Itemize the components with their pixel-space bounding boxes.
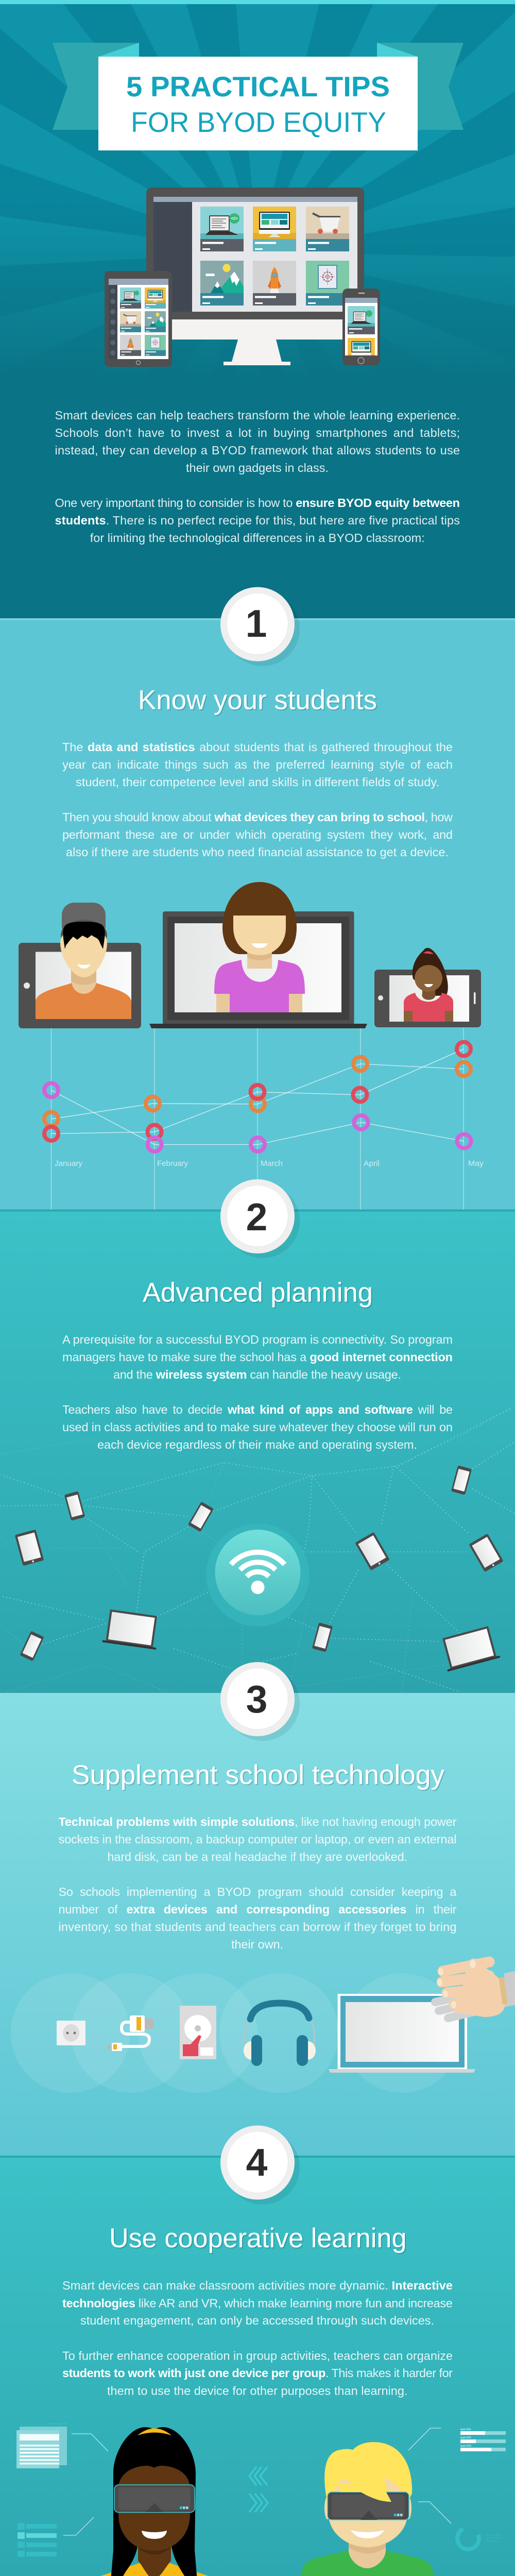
text: section 4: Smart devices can make classroom activities more dynamic. Interactive xyxy=(62,2279,453,2292)
icon: progress ring: Your progress xyxy=(486,2534,502,2537)
icon: notes panel: learning notes xyxy=(49,2422,67,2426)
text: section 4 xyxy=(62,2279,453,2398)
icon: hand xyxy=(435,1959,515,2018)
illustration: devices xyxy=(105,188,380,367)
icon: chevrons xyxy=(249,2467,268,2512)
icon: hard disk xyxy=(180,2006,216,2059)
text: section 3: inventory, so that students and teachers can borrow if they forget to bring xyxy=(59,1920,456,1934)
tablet xyxy=(105,271,172,367)
text: section 1: also if there are students who need financial assistance to get a device. xyxy=(66,845,449,859)
text: section 2: A prerequisite for a successful BYOD program is connectivity. So program xyxy=(62,1333,453,1346)
text: section 4: student engagement, can only be accessed through such devices. xyxy=(80,2314,434,2327)
intro text: for limiting the technological differences in a BYOD classroom: xyxy=(90,531,425,545)
text: section 2: each device regardless of their make and operating system. xyxy=(97,1438,417,1451)
top strip xyxy=(0,0,515,4)
number badge 2: 2 xyxy=(246,1195,267,1239)
heading: Supplement school technology: Supplement school technology xyxy=(72,1760,444,1790)
intro text: Schools don’t have to invest a lot in buying smartphones and tablets; xyxy=(55,426,460,439)
background circles xyxy=(10,1973,462,2093)
title line 2: FOR BYOD EQUITY xyxy=(131,106,386,138)
icon: list xyxy=(18,2523,57,2557)
icon: progress ring: assignment xyxy=(486,2540,499,2543)
text: section 1: student, their competence level and skills in different fields of study. xyxy=(76,775,439,789)
chart: student progress by month: March xyxy=(261,1160,283,1168)
panel: section 2 background xyxy=(0,1210,515,1693)
character: boy with VR headset xyxy=(301,2442,434,2576)
intro text: One very important thing to consider is how to ensure BYOD equity between xyxy=(55,496,460,510)
monitor xyxy=(146,188,364,365)
text: section 4: To further enhance cooperation in group activities, teachers can organize xyxy=(62,2349,453,2363)
devices around the wifi hub xyxy=(15,1465,504,1672)
network: dotted connections xyxy=(0,1408,515,1693)
monitor: </> xyxy=(231,216,238,221)
text: section 3: sockets in the classroom, a backup computer or laptop, or even an external xyxy=(59,1833,456,1846)
intro text: instead, they can develop a BYOD framework that allows students to use xyxy=(55,444,460,457)
icon: headphones xyxy=(244,2003,316,2066)
icon: task bars: task 001 xyxy=(460,2428,471,2431)
text: section 2: and the wireless system can handle the heavy usage. xyxy=(113,1368,401,1381)
icon: power socket xyxy=(57,2021,85,2045)
title line 1: 5 PRACTICAL TIPS xyxy=(126,71,390,103)
number badge 3 xyxy=(220,1662,300,1741)
heading: Use cooperative learning: Use cooperative learning xyxy=(109,2223,407,2253)
icon: usb cable xyxy=(107,2015,153,2051)
text: section 1: The data and statistics about students that is gathered throughout the xyxy=(62,740,453,754)
intro text: Smart devices can help teachers transform the whole learning experience. xyxy=(55,409,460,422)
text: section 2: used in class activities and to make sure whatever they choose will run on xyxy=(62,1420,453,1434)
intro text: their own gadgets in class. xyxy=(186,461,329,474)
phone xyxy=(342,289,380,366)
text: section 4: students to work with just one device per group. This makes it harder for xyxy=(62,2366,453,2380)
panel: section 3 background xyxy=(0,1693,515,2156)
illustration: VR students xyxy=(16,2422,506,2576)
background: sunburst rays xyxy=(0,4,515,618)
text: section 4: technologies like AR and VR, which make learning more fun and increase xyxy=(62,2297,453,2310)
number badge 3: 3 xyxy=(246,1677,267,1721)
number badge 1: 1 xyxy=(246,602,267,645)
heading: Know your students: Know your students xyxy=(138,685,377,715)
text: section 3: hard disk, can be a real headache if they are overlooked. xyxy=(107,1850,407,1863)
text: section 3 xyxy=(59,1815,457,1951)
number badge 2 xyxy=(220,1179,300,1258)
heading: Advanced planning: Advanced planning xyxy=(143,1278,373,1308)
text: section 3: So schools implementing a BYOD program should consider keeping a xyxy=(59,1885,457,1899)
intro text: students. There is no perfect recipe for this, but here are five practical tips xyxy=(55,514,460,527)
text: section 2: managers have to make sure the school has a good internet connection xyxy=(62,1350,453,1364)
illustration: girl on phone xyxy=(374,948,481,1027)
text: section 1: performant these are or under which operating system they work, and xyxy=(62,828,453,841)
chart: student progress by month: May xyxy=(468,1160,484,1168)
text: section 4: them to use the device for other purposes than learning. xyxy=(107,2384,408,2398)
text: section 2 xyxy=(62,1333,453,1451)
text: section 3: number of extra devices and corresponding accessories in their xyxy=(59,1903,457,1916)
text: section 1 xyxy=(62,740,453,859)
icon: task bars: task 002 xyxy=(460,2436,471,2439)
icon: task bars: task 003 xyxy=(460,2445,471,2448)
chart: student progress by month: April xyxy=(364,1160,380,1168)
chart: student progress by month: February xyxy=(157,1160,188,1168)
icon: progress ring: on the current xyxy=(486,2537,502,2540)
text: section 1: Then you should know about what devices they can bring to school, how xyxy=(62,810,453,824)
icon: laptop xyxy=(329,1994,475,2073)
character: girl with VR headset xyxy=(74,2427,232,2576)
icon: progress ring xyxy=(454,2524,502,2552)
illustration: boy on tablet xyxy=(19,903,141,1028)
title ribbon xyxy=(53,43,464,150)
illustration: girl on laptop xyxy=(149,882,367,1028)
icon: notes panel xyxy=(16,2422,67,2468)
icon: wifi hub xyxy=(206,1523,309,1626)
number badge 4: 4 xyxy=(246,2141,268,2184)
text: section 2: Teachers also have to decide what kind of apps and software will be xyxy=(62,1403,453,1416)
text: section 1: year can indicate things such as the preferred learning style of each xyxy=(62,758,453,771)
illustration: accessories xyxy=(10,1959,515,2093)
text: section 3: their own. xyxy=(231,1938,283,1951)
icon: task bars xyxy=(460,2428,506,2451)
chart: student progress by month xyxy=(44,1028,484,1210)
text: section 3: Technical problems with simple solutions, like not having enough power xyxy=(59,1815,457,1828)
number badge 4 xyxy=(220,2126,300,2205)
panel: section 4 background xyxy=(0,2156,515,2576)
intro text xyxy=(55,409,460,545)
panel: section 1 background xyxy=(0,618,515,1210)
connector lines xyxy=(63,2428,451,2535)
chart: student progress by month: January xyxy=(55,1160,83,1168)
number badge 1 xyxy=(220,587,300,666)
